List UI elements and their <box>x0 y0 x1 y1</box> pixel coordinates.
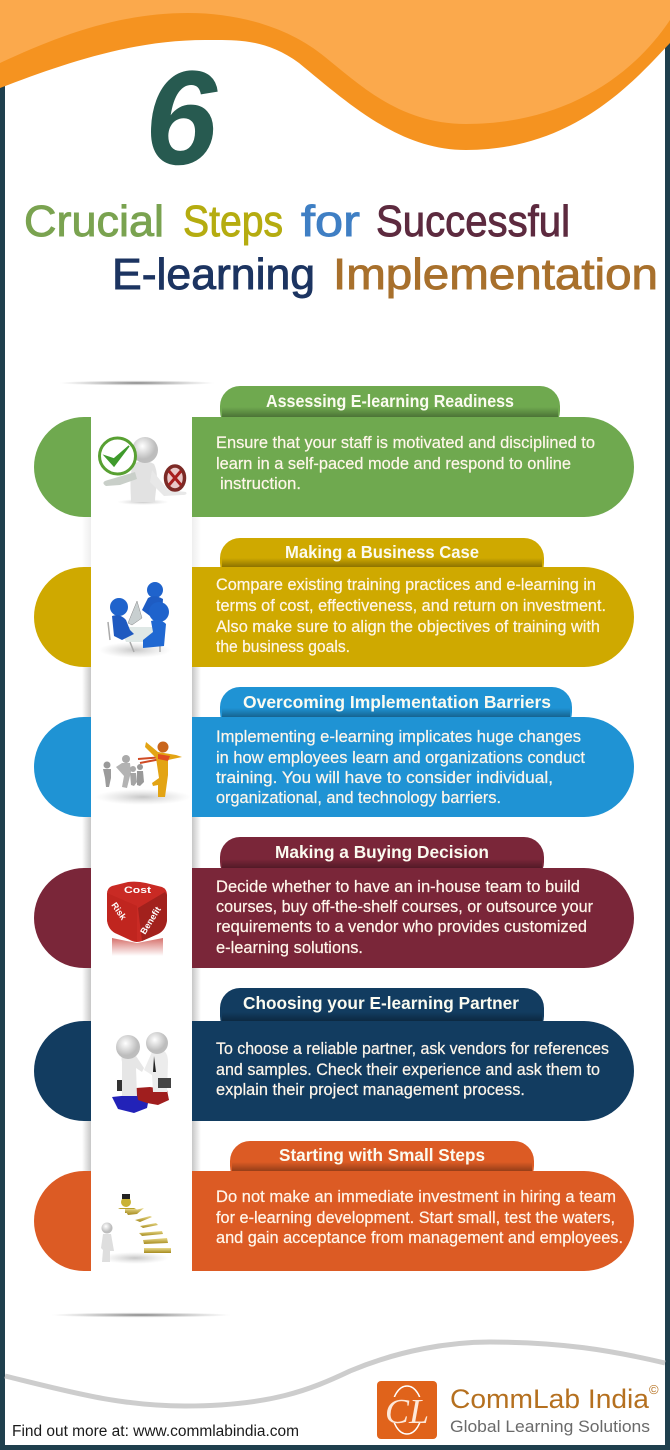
header wave <box>0 0 670 150</box>
panel body 6 <box>34 1171 634 1271</box>
title line 1: Crucial <box>24 197 164 246</box>
body text 4: e-learning solutions. <box>216 939 363 957</box>
body text 2: terms of cost, effectiveness, and return on investment. <box>216 597 606 615</box>
body text 4 <box>216 878 593 957</box>
body text 1: learn in a self-paced mode and respond to online <box>216 455 571 473</box>
tab shape 3 <box>220 687 572 732</box>
body text 1 <box>216 434 595 493</box>
die label risk: Risk <box>109 900 129 923</box>
icon: person and golden stairs <box>101 1194 171 1264</box>
logo mark: CL <box>385 1392 429 1431</box>
tab shape 2 <box>220 538 544 583</box>
body text 3 <box>216 728 585 807</box>
body text 5 <box>216 1040 609 1099</box>
body text 3: organizational, and technology barriers. <box>216 789 501 807</box>
icon: handshake on puzzle pieces <box>112 1032 171 1113</box>
body text 1: Ensure that your staff is motivated and disciplined to <box>216 434 595 452</box>
body text 1: instruction. <box>220 475 301 493</box>
body text 2: Also make sure to align the objectives of training with <box>216 618 600 636</box>
title line 2: E-learning <box>112 250 315 299</box>
title line 1: Successful <box>376 197 570 246</box>
die label cost: Cost <box>124 885 151 895</box>
tab shape 1 <box>220 386 560 431</box>
body text 3: training. You will have to consider individual, <box>216 769 553 787</box>
body text 4: Decide whether to have an in-house team to build <box>216 878 580 896</box>
body text 6: Do not make an immediate investment in hiring a team <box>216 1188 616 1206</box>
tab shape 5 <box>220 988 544 1036</box>
tab shape 4 <box>220 837 544 882</box>
icon: blue people at a table <box>99 582 171 658</box>
title line 2: Implementation <box>333 250 658 299</box>
body text 6: and gain acceptance from management and employees. <box>216 1229 623 1247</box>
die label benefit: Benefit <box>138 905 163 936</box>
panel: step 2 business case <box>34 538 634 667</box>
heading 3: Overcoming Implementation Barriers <box>243 692 551 712</box>
panel body 5 <box>34 1021 634 1121</box>
panel body 3 <box>34 717 634 817</box>
title <box>24 44 658 299</box>
heading 6: Starting with Small Steps <box>279 1145 485 1165</box>
tab shape 6 <box>230 1141 534 1186</box>
title line 1: Steps <box>183 197 283 246</box>
heading 1: Assessing E-learning Readiness <box>266 391 514 411</box>
panel: step 1 assessing readiness <box>34 386 634 517</box>
panel: step 6 small steps <box>34 1141 634 1271</box>
find out more link text: Find out more at: www.commlabindia.com <box>12 1423 299 1440</box>
bottom floor shadow <box>51 1312 231 1318</box>
body text 4: requirements to a vendor who provides customized <box>216 918 587 936</box>
icon: runner breaking finish line <box>95 742 191 805</box>
icon: red cost risk benefit die <box>107 882 167 956</box>
title line 1: for <box>301 197 360 246</box>
body text 5: To choose a reliable partner, ask vendors for references <box>216 1040 609 1058</box>
body text 2 <box>216 576 606 656</box>
title numeral 6: 6 <box>145 44 218 193</box>
body text 2: the business goals. <box>216 638 350 656</box>
logo mark <box>377 1381 437 1439</box>
heading 2: Making a Business Case <box>285 542 479 562</box>
copyright mark: © <box>649 1382 659 1397</box>
body text 5: explain their project management process. <box>216 1081 525 1099</box>
column side shadows <box>82 517 201 1171</box>
body text 6 <box>216 1188 623 1247</box>
body text 2: Compare existing training practices and e-learning in <box>216 576 596 594</box>
panel body 2 <box>34 567 634 667</box>
footer swoosh <box>5 1342 665 1406</box>
panel body 1 <box>34 417 634 517</box>
body text 5: and samples. Check their experience and ask them to <box>216 1061 600 1079</box>
top floor shadow <box>59 380 215 386</box>
body text 3: in how employees learn and organizations conduct <box>216 749 585 767</box>
body text 4: courses, buy off-the-shelf courses, or outsource your <box>216 898 593 916</box>
body text 6: for e-learning development. Start small, test the waters, <box>216 1209 615 1227</box>
body text 3: Implementing e-learning implicates huge changes <box>216 728 581 746</box>
white icon column <box>91 415 192 1272</box>
panel body 4 <box>34 868 634 968</box>
heading 5: Choosing your E-learning Partner <box>243 993 519 1013</box>
logo: CommLab India <box>377 1381 659 1439</box>
panel: step 5 e-learning partner <box>34 988 634 1121</box>
panel: step 4 buying decision <box>34 837 634 968</box>
tagline: Global Learning Solutions <box>450 1417 650 1436</box>
heading 4: Making a Buying Decision <box>275 842 489 862</box>
icon: figure weighing check and cross <box>100 437 186 505</box>
brand name: CommLab India <box>450 1384 650 1414</box>
panel: step 3 implementation barriers <box>34 687 634 817</box>
